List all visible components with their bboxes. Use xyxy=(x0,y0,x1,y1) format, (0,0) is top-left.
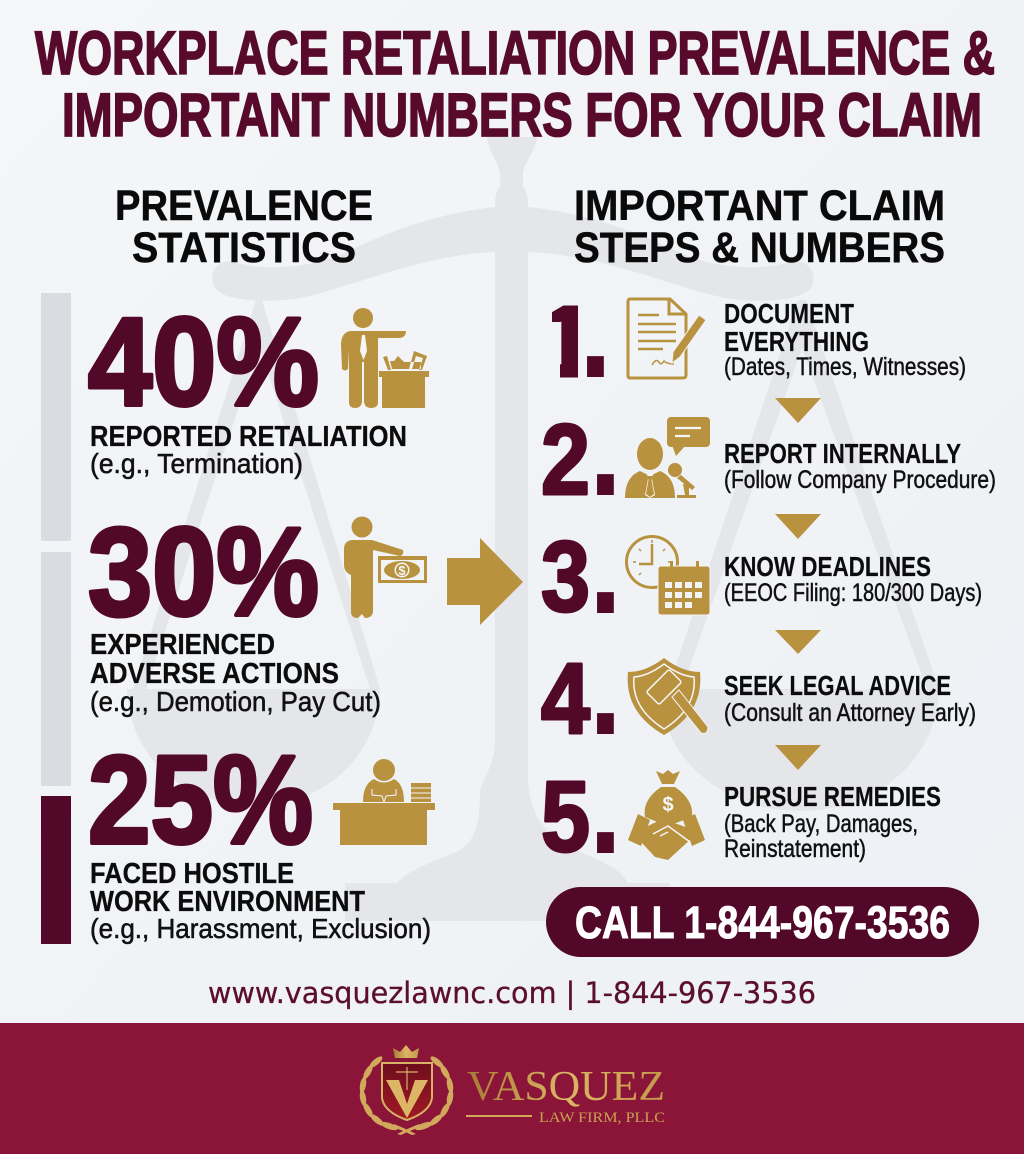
step 5: 5 xyxy=(541,761,590,873)
step 2: REPORT INTERNALLY xyxy=(724,438,961,469)
logo wordmark: VASQUEZ xyxy=(467,1064,665,1110)
step 5 xyxy=(541,726,941,883)
connector arrow 2 xyxy=(775,514,821,539)
stat: 30 percent: 30% xyxy=(88,503,319,642)
step 5: Reinstatement) xyxy=(724,835,866,863)
step 1: EVERYTHING xyxy=(724,326,869,357)
heading: important claim steps xyxy=(574,182,945,272)
step 5: PURSUE REMEDIES xyxy=(724,781,941,812)
icon: boss pointing at box of belongings xyxy=(341,308,429,408)
icon: money bag and handshake: $ xyxy=(662,794,674,816)
footer band xyxy=(0,1023,1024,1154)
heading: important claim steps: IMPORTANT CLAIM xyxy=(574,182,945,230)
heading: prevalence statistics: PREVALENCE xyxy=(115,182,373,230)
heading: important claim steps: STEPS & NUMBERS xyxy=(574,224,945,272)
stat: 25 percent: (e.g., Harassment, Exclusion) xyxy=(90,913,431,944)
stat: 25 percent xyxy=(88,731,431,944)
icon: person at desk xyxy=(333,759,435,845)
step 4 xyxy=(541,607,976,764)
step 3: . xyxy=(589,486,622,643)
arrow xyxy=(447,538,523,625)
icon: person handing money xyxy=(344,516,427,618)
step 5: (Back Pay, Damages, xyxy=(724,810,918,838)
logo wordmark: LAW FIRM, PLLC xyxy=(539,1110,665,1126)
step 3: 3 xyxy=(541,521,590,633)
title xyxy=(35,19,995,149)
heading: prevalence statistics xyxy=(115,182,373,272)
step 3: KNOW DEADLINES xyxy=(724,551,931,582)
icon: money bag and handshake xyxy=(628,770,705,860)
stat: 40 percent: 40% xyxy=(88,293,319,432)
step 1: DOCUMENT xyxy=(724,298,854,329)
stat: 30 percent: ADVERSE ACTIONS xyxy=(90,658,339,690)
step 2 xyxy=(541,368,996,525)
step 2: 2 xyxy=(541,404,590,516)
icon: document and pen xyxy=(628,299,706,378)
stat: 25 percent: FACED HOSTILE xyxy=(90,858,294,890)
connector arrow 4 xyxy=(775,745,821,770)
website and phone line: www.vasquezlawnc.com | 1-844-967-3536 xyxy=(208,976,816,1010)
call to action button: CALL 1-844-967-3536 xyxy=(575,897,950,948)
icon: shield with gavel xyxy=(628,658,708,735)
icon: clock and calendar xyxy=(626,536,710,615)
stat: 25 percent: 25% xyxy=(88,731,313,870)
connector arrow 1 xyxy=(775,398,821,423)
step 4: SEEK LEGAL ADVICE xyxy=(724,670,951,701)
watermark: scales of justice xyxy=(127,137,939,921)
step 4: (Consult an Attorney Early) xyxy=(724,699,976,727)
heading: prevalence statistics: STATISTICS xyxy=(132,224,356,272)
progress bars xyxy=(41,293,71,944)
connector arrow 3 xyxy=(775,630,821,654)
stat: 30 percent: (e.g., Demotion, Pay Cut) xyxy=(90,686,381,717)
step 1: (Dates, Times, Witnesses) xyxy=(724,353,966,381)
step 1: 1 xyxy=(537,286,599,398)
step 4: . xyxy=(589,607,622,764)
stat: 40 percent: (e.g., Termination) xyxy=(90,448,303,479)
logo emblem xyxy=(359,1045,454,1135)
step 4: 4 xyxy=(541,643,590,755)
icon: speaker with microphone xyxy=(625,417,710,498)
stat: 40 percent xyxy=(88,293,407,479)
step 5: . xyxy=(589,726,622,883)
call to action button xyxy=(546,887,979,957)
step 1: . xyxy=(579,250,612,407)
step 1 xyxy=(552,298,965,380)
stat: 30 percent: EXPERIENCED xyxy=(90,629,275,661)
stat: 25 percent: WORK ENVIRONMENT xyxy=(90,886,365,918)
icon: person handing money: $ xyxy=(398,563,406,578)
step 3 xyxy=(541,486,982,643)
stat: 40 percent: REPORTED RETALIATION xyxy=(90,421,407,453)
stat: 30 percent xyxy=(88,503,381,717)
step 2: . xyxy=(589,368,622,525)
